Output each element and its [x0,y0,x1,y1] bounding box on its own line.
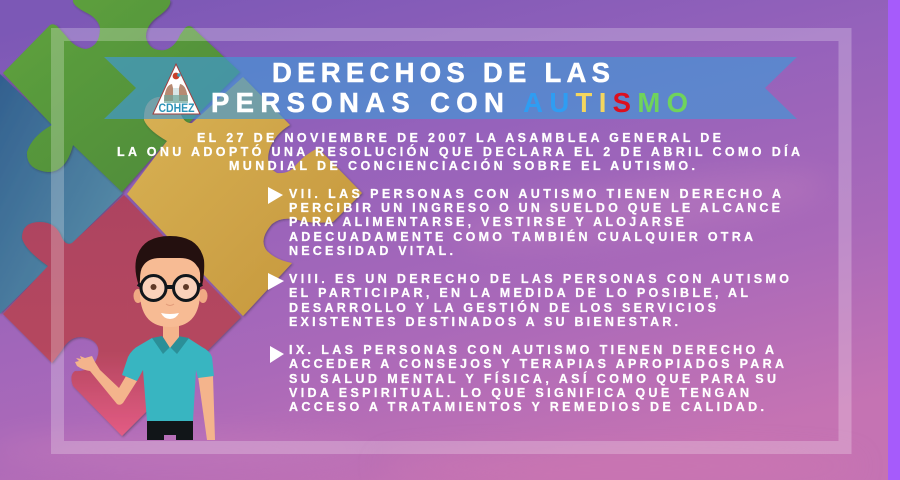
arrow: right VII [268,187,283,204]
arrow: right IX [270,346,284,363]
text block: right VIII [289,272,789,329]
text block: right VIII: VIII. ES UN DERECHO DE LAS PERSONAS CON AUTISMO [289,272,789,286]
puzzle graphic [0,0,362,436]
text block: right IX: SU SALUD MENTAL Y FÍSICA, ASÍ COMO QUE PARA SU [289,371,776,386]
icon: CDHEZ logo [153,64,200,115]
smile [161,313,179,319]
text block: right VIII: EL PARTICIPAR, EN LA MEDIDA DE LO POSIBLE, AL [289,286,748,300]
text block: right IX: ACCEDER A CONSEJOS Y TERAPIAS APROPIADOS PARA [289,357,784,371]
text block: right VIII: EXISTENTES DESTINADOS A SU BIENESTAR. [289,315,678,329]
puzzle piece: green [3,0,240,192]
raised arm and hand [75,356,137,405]
hair [135,236,204,286]
puzzle piece: yellow [127,77,362,316]
eyes [150,284,189,290]
text block: right IX: ACCESO A TRATAMIENTOS Y REMEDIOS DE CALIDAD. [289,400,764,414]
text block: right IX: VIDA ESPIRITUAL. LO QUE SIGNIFICA QUE TENGAN [289,386,749,400]
text block: right VII: PARA ALIMENTARSE, VESTIRSE Y ALOJARSE [289,215,684,229]
trousers [147,420,193,440]
intro text: EL 27 DE NOVIEMBRE DE 2007 LA ASAMBLEA GENERAL DE [197,131,721,145]
text block: right IX: IX. LAS PERSONAS CON AUTISMO TIENEN DERECHO A [289,343,774,357]
arrow: right VIII [268,273,284,290]
text block: right VII: ADECUADAMENTE COMO TAMBIÉN CUALQUIER OTRA [289,229,753,244]
nose [166,304,174,306]
text block: right VII: PERCIBIR UN INGRESO O UN SUELDO QUE LE ALCANCE [289,201,780,215]
icon: CDHEZ logo: CDHEZ [158,103,194,115]
intro text: MUNDIAL DE CONCIENCIACIÓN SOBRE EL AUTISMO. [229,158,695,173]
text block: right IX [289,343,784,414]
puzzle piece: blue [0,74,123,314]
title ribbon [104,57,797,119]
text block: right VII [289,187,781,258]
translucent frame [58,34,845,448]
intro text [117,131,800,173]
title [211,57,688,118]
head [140,256,200,327]
puzzle piece: red [3,195,241,436]
neck [163,322,179,348]
ears [134,289,142,303]
title: DERECHOS DE LAS [272,57,610,88]
right purple bar [888,0,900,480]
collar [152,336,189,354]
shirt [122,338,214,421]
glasses [138,276,202,300]
right arm [198,376,215,440]
text block: right VIII: DESARROLLO Y LA GESTIÓN DE LOS SERVICIOS [289,300,716,315]
eyebrows [145,276,195,280]
intro text: LA ONU ADOPTÓ UNA RESOLUCIÓN QUE DECLARA EL 2 DE ABRIL COMO DÍA [117,144,800,159]
text block: right VII: VII. LAS PERSONAS CON AUTISMO TIENEN DERECHO A [289,187,781,201]
character: man with glasses [75,236,215,440]
text block: right VII: NECESIDAD VITAL. [289,244,453,258]
title: PERSONAS CON AUTISMO [211,87,688,118]
